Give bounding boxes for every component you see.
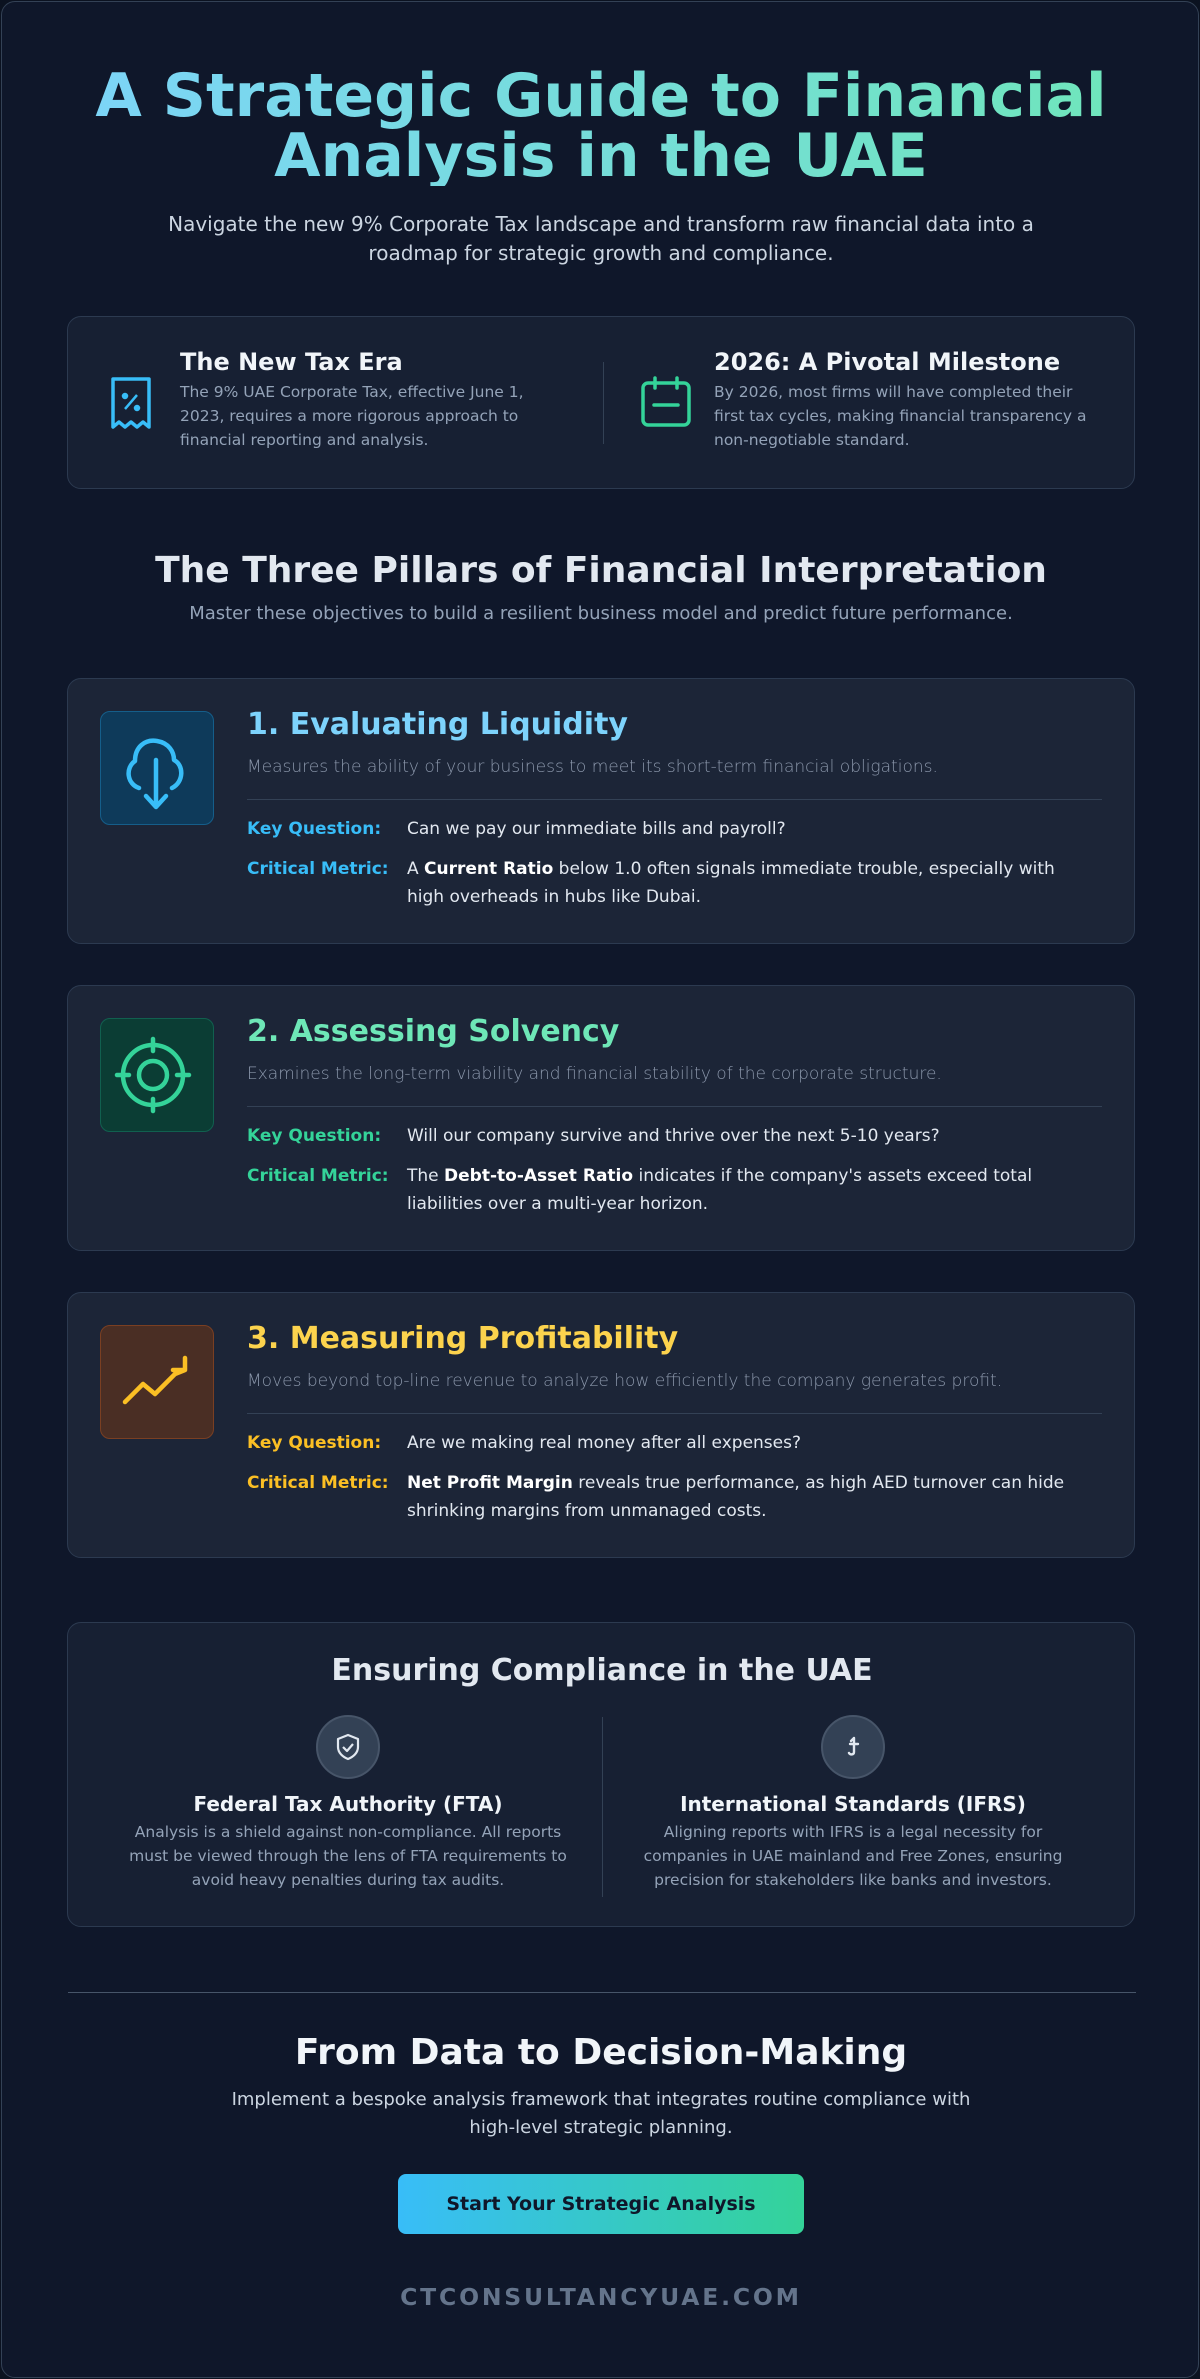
heading: data to decision: From Data to Decision-Making [295,2032,907,2073]
text: 2026 milestone: By 2026, most firms will have completed their first tax cycles, making financial transparency a non-negotiable standard. [714,383,1087,449]
key question: Can we pay our immediate bills and payroll? [407,819,786,839]
title: Analysis in the UAE [274,121,928,191]
text: closing [232,2089,970,2138]
key question: Will our company survive and thrive over the next 5-10 years? [407,1126,940,1146]
description: Measures the ability of your business to meet its short-term financial obligations. [247,757,938,777]
icon: target [100,1018,214,1132]
critical metric: Critical Metric: [247,859,389,879]
footer: CTCONSULTANCYUAE.COM [400,2283,802,2311]
text: the new tax era [180,348,524,449]
text: closing: Implement a bespoke analysis framework that integrates routine compliance with [232,2089,970,2110]
description: Examines the long-term viability and financial stability of the corporate structure. [247,1064,942,1084]
title: A Strategic Guide to Financial [95,61,1107,131]
column: IFRS: Aligning reports with IFRS is a legal necessity for companies in UAE mainland and Free Zones, ensuring precision for stakeholders like banks and investors. [644,1823,1062,1889]
button [398,2174,804,2234]
key question: Key Question: [247,819,381,839]
heading: three pillars: The Three Pillars of Financial Interpretation [155,550,1047,591]
title: 3. Measuring Profitability [247,1321,678,1356]
key question: Key Question: [247,1126,381,1146]
column: FTA: Federal Tax Authority (FTA) [194,1792,502,1816]
column: FTA [129,1715,567,1889]
icon: scale [821,1715,885,1779]
panel: profitability [67,1292,1135,1558]
text: the new tax era: The 9% UAE Corporate Tax, effective June 1, 2023, requires a more rigorous approach to financial reporting and analysis. [180,383,524,449]
panel: liquidity [67,678,1135,944]
panel: solvency [67,985,1135,1251]
panel: compliance [67,1622,1135,1927]
panel: tax era info [67,316,1135,489]
subtitle [168,212,1034,265]
icon: cloud download [100,711,214,825]
text: the new tax era: The New Tax Era [180,348,403,376]
critical metric: Net Profit Margin reveals true performance, as high AED turnover can hide shrinking margins from unmanaged costs. [407,1473,1064,1521]
column: IFRS [644,1715,1062,1889]
critical metric: The Debt-to-Asset Ratio indicates if the company's assets exceed total liabilities over a multi-year horizon. [407,1166,1032,1214]
column: FTA: Analysis is a shield against non-compliance. All reports must be viewed through the lens of FTA requirements to avoid heavy penalties during tax audits. [129,1823,567,1889]
subheading: Master these objectives to build a resilient business model and predict future performance. [189,603,1013,624]
text: 2026 milestone: 2026: A Pivotal Milestone [714,348,1060,376]
icon: receipt [111,377,151,429]
subtitle: Navigate the new 9% Corporate Tax landscape and transform raw financial data into a [168,212,1034,236]
text: 2026 milestone [714,348,1087,449]
title: 1. Evaluating Liquidity [247,707,628,742]
subtitle: roadmap for strategic growth and compliance. [368,241,834,265]
text: closing: high-level strategic planning. [469,2117,733,2138]
column: IFRS: International Standards (IFRS) [680,1792,1026,1816]
icon: trending up [100,1325,214,1439]
critical metric: A Current Ratio below 1.0 often signals immediate trouble, especially with high overheads in hubs like Dubai. [407,859,1055,907]
button: Start Your Strategic Analysis [446,2193,756,2215]
icon: shield [316,1715,380,1779]
title [2,66,1200,186]
key question: Are we making real money after all expenses? [407,1433,801,1453]
heading: Ensuring Compliance in the UAE [331,1653,873,1688]
critical metric: Critical Metric: [247,1166,389,1186]
title: 2. Assessing Solvency [247,1014,619,1049]
critical metric: Critical Metric: [247,1473,389,1493]
icon: calendar [641,376,691,427]
key question: Key Question: [247,1433,381,1453]
description: Moves beyond top-line revenue to analyze how efficiently the company generates profit. [247,1371,1002,1391]
